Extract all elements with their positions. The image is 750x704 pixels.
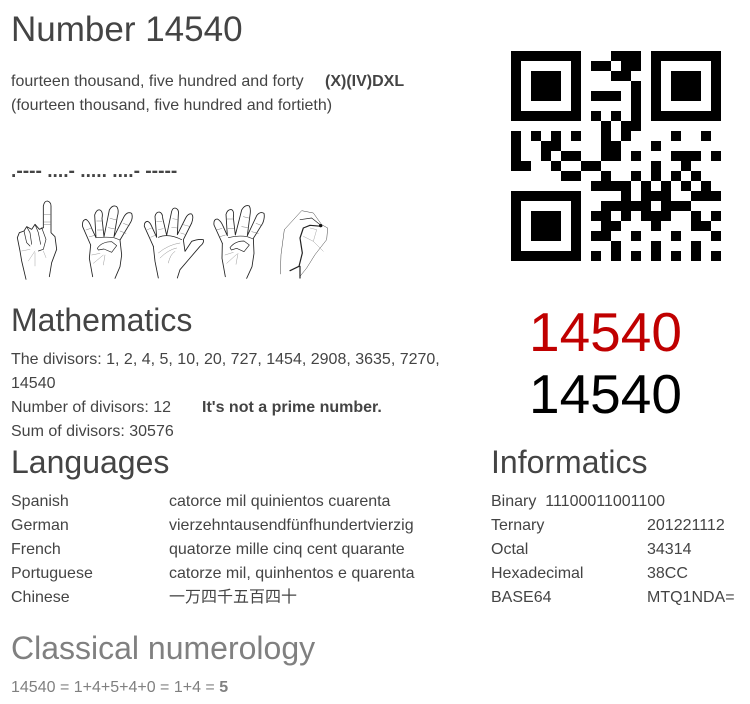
hand sign: 4: [82, 206, 132, 278]
heading: Informatics: Informatics: [491, 444, 647, 480]
language names: German: [11, 517, 69, 534]
language translations: catorze mil, quinhentos e quarenta: [169, 565, 414, 582]
language names: Chinese: [11, 589, 70, 606]
hand sign: 0: [280, 211, 328, 278]
informatics values: MTQ1NDA=: [647, 589, 735, 606]
number name in words: [11, 73, 332, 114]
sign language hands: [16, 200, 328, 280]
language translations: quatorze mille cinq cent quarante: [169, 541, 405, 558]
binary value: Binary 11100011001100: [491, 493, 665, 510]
roman numeral: (X)(IV)DXL: [325, 73, 404, 90]
heading: Mathematics: Mathematics: [11, 302, 192, 338]
sum of divisors: Sum of divisors: 30576: [11, 423, 174, 440]
language translations: 一万四千五百四十: [169, 589, 297, 606]
divisors list: [11, 351, 440, 392]
informatics names: Ternary: [491, 517, 544, 534]
hand sign: 1: [17, 201, 57, 279]
numerology calculation: 14540 = 1+4+5+4+0 = 1+4 = 5: [11, 679, 228, 696]
heading: Languages: Languages: [11, 444, 169, 480]
informatics names: Octal: [491, 541, 528, 558]
hand sign: 4: [214, 206, 264, 278]
heading: Classical numerology: Classical numerology: [11, 630, 315, 666]
number of divisors: Number of divisors: 12: [11, 399, 171, 416]
language names: Portuguese: [11, 565, 93, 582]
informatics values: 38CC: [647, 565, 688, 582]
informatics names: Hexadecimal: [491, 565, 583, 582]
language names: Spanish: [11, 493, 69, 510]
morse code: .---- ....- ..... ....- -----: [11, 161, 177, 182]
divisors list: The divisors: 1, 2, 4, 5, 10, 20, 727, 1454, 2908, 3635, 7270,: [11, 351, 440, 368]
QR code: [511, 51, 721, 261]
informatics names: BASE64: [491, 589, 551, 606]
informatics values: 201221112: [647, 517, 725, 534]
informatics names: [491, 517, 583, 606]
divisors list: 14540: [11, 375, 56, 392]
title: Number 14540: [11, 10, 243, 49]
big black number: 14540: [529, 363, 682, 425]
language translations: vierzehntausendfünfhundertvierzig: [169, 517, 414, 534]
informatics values: [647, 517, 735, 606]
number name in words: fourteen thousand, five hundred and forty: [11, 73, 304, 90]
informatics values: 34314: [647, 541, 692, 558]
language names: French: [11, 541, 61, 558]
language names: [11, 493, 93, 606]
big red number: 14540: [529, 301, 682, 363]
language translations: catorce mil quinientos cuarenta: [169, 493, 390, 510]
hand sign: 5: [144, 208, 204, 278]
number name in words: (fourteen thousand, five hundred and fortieth): [11, 97, 332, 114]
language translations: [169, 493, 415, 606]
prime statement: It's not a prime number.: [202, 399, 382, 416]
